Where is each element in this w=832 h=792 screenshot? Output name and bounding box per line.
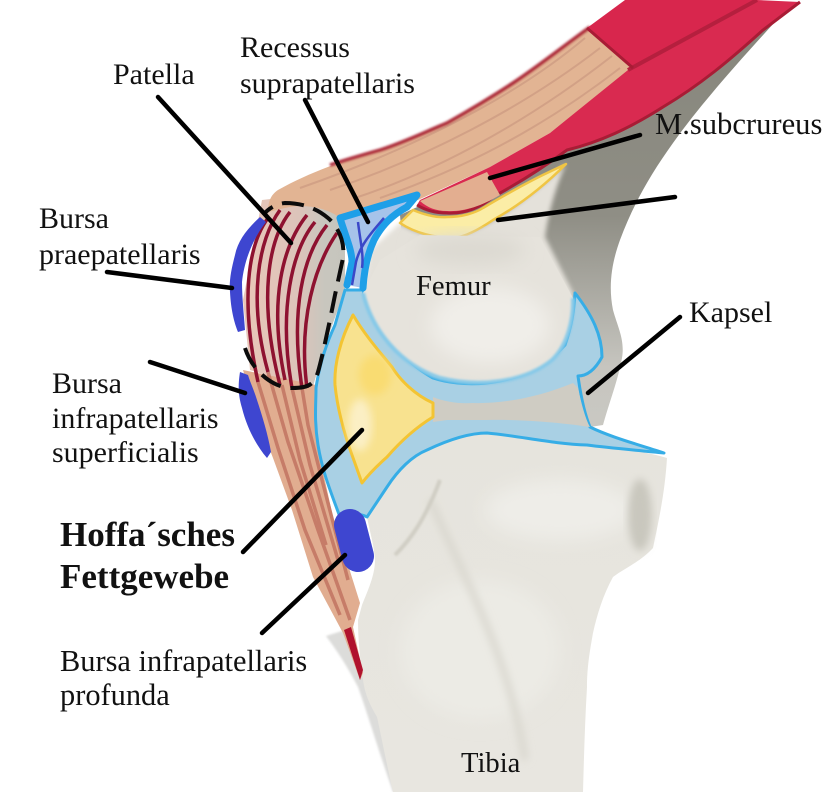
label: Femur: Femur [416, 271, 491, 302]
label: Recessus suprapatellaris: Recessus [240, 31, 350, 64]
label: Bursa infrapatellaris superficialis: superficialis [52, 436, 199, 469]
rectus muscle [587, 0, 757, 68]
leader: Bursa praepatellaris [107, 272, 232, 288]
patella bone [243, 190, 345, 390]
tibia shadow [326, 630, 400, 792]
bursa infrapatellaris profunda [350, 525, 358, 556]
label: Tibia: Tibia [461, 748, 521, 779]
leader: Bursa profunda [262, 555, 345, 633]
femur shaft [400, 22, 775, 453]
tibia [358, 433, 667, 792]
leader: Kapsel [588, 317, 680, 393]
leader: Patella [158, 97, 291, 243]
label: Bursa infrapatellaris superficialis: infrapatellaris [52, 402, 219, 435]
joint capsule [316, 290, 664, 517]
label: Bursa praepatellaris: praepatellaris [39, 238, 201, 271]
label: Kapsel: Kapsel [689, 296, 772, 329]
patella fibres [248, 210, 337, 388]
leader: suprapatellar fat [498, 197, 675, 220]
label: Patella: Patella [113, 58, 195, 91]
label: Hoffa'sches Fettgewebe: Fettgewebe [60, 557, 229, 596]
suprapatellar fat [400, 164, 566, 238]
leader: Bursa infrapatellaris superficialis [150, 362, 245, 393]
vastus muscle [417, 0, 800, 213]
Hoffa fat pad [335, 315, 433, 483]
label: Hoffa'sches Fettgewebe: Hoffa´sches [60, 515, 235, 554]
label: Bursa infrapatellaris profunda: Bursa infrapatellaris [60, 644, 307, 678]
leader lines [107, 97, 680, 633]
patella outline dashed [245, 203, 343, 388]
bursa infrapatellaris superficialis [239, 372, 271, 458]
label: Recessus suprapatellaris: suprapatellaris [240, 67, 415, 100]
knee illustration [230, 0, 800, 792]
label: Bursa infrapatellaris superficialis: Bursa [52, 367, 122, 400]
label: Bursa praepatellaris: Bursa [39, 202, 109, 235]
leader: Hoffa [243, 430, 362, 552]
joint space [433, 383, 590, 427]
femoral condyle upper bone [363, 164, 573, 383]
leader: Recessus [305, 100, 368, 222]
condyle [363, 235, 573, 383]
recessus suprapatellaris [340, 195, 417, 288]
label: M. subcrureus: M.subcrureus [655, 107, 822, 141]
leader: M. subcrureus [490, 135, 640, 178]
patellar tendon [243, 370, 363, 680]
bursa praepatellaris [230, 217, 266, 332]
quadriceps tendon [268, 27, 640, 218]
label: Bursa infrapatellaris profunda: profunda [60, 678, 170, 712]
